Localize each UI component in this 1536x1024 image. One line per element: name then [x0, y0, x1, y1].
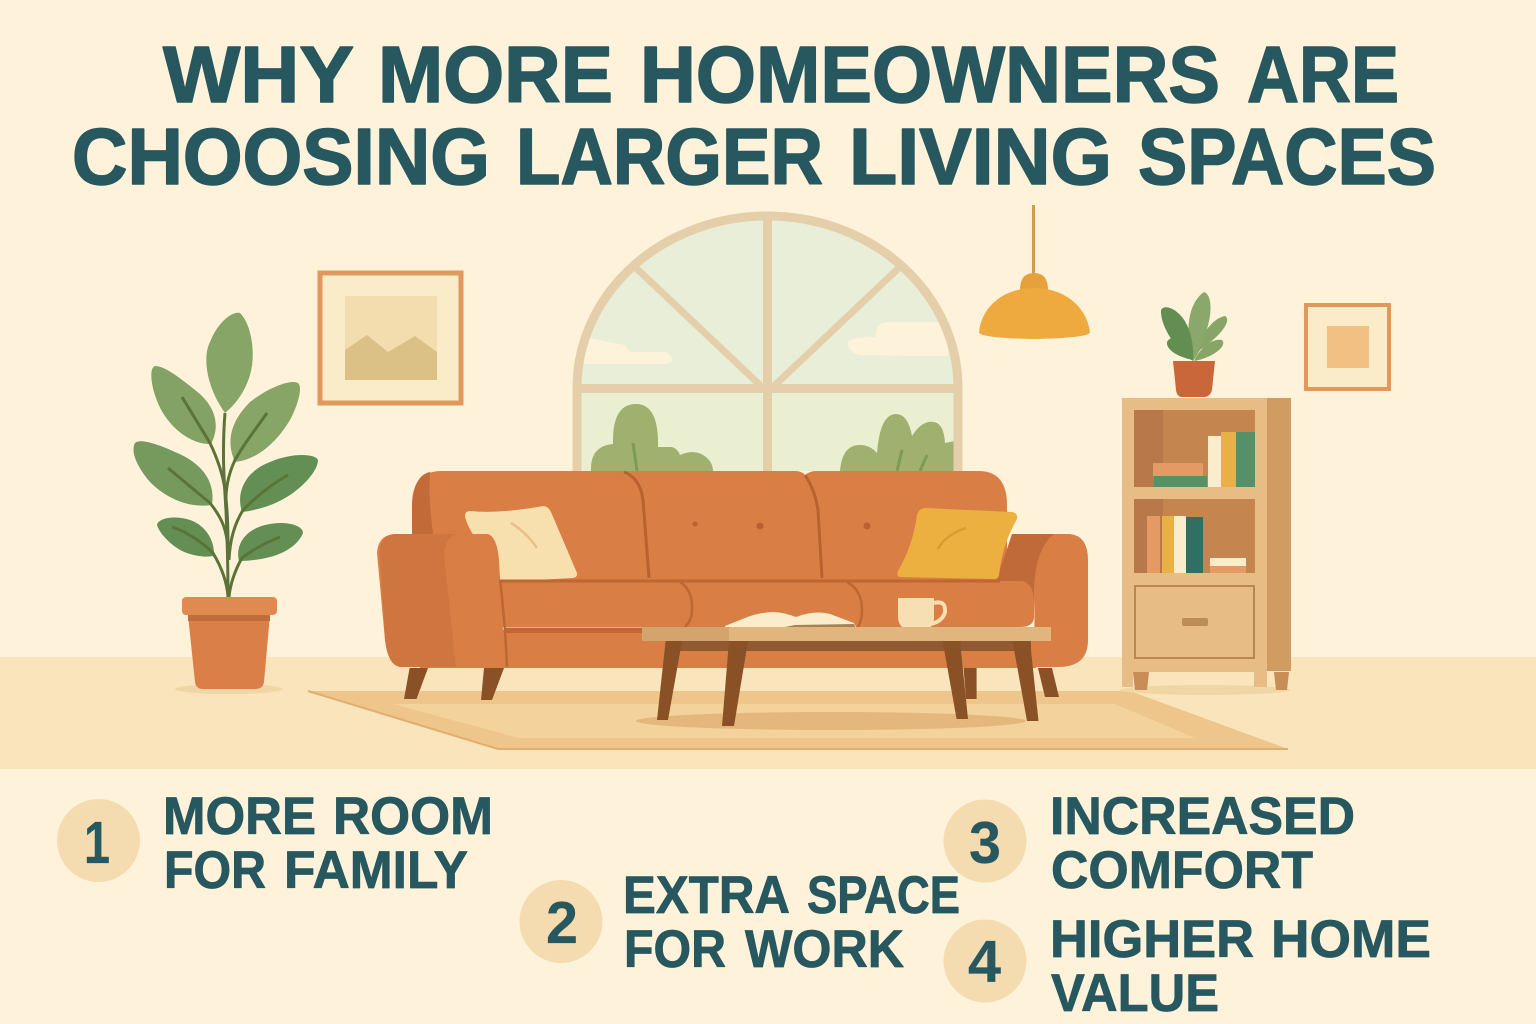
floor plant	[133, 313, 318, 694]
title: LARGER	[516, 112, 823, 201]
reason 3: 3	[969, 810, 1001, 876]
title	[72, 30, 1436, 201]
reason 2: FOR	[624, 920, 726, 979]
reason 3	[944, 787, 1355, 900]
rug	[308, 691, 1288, 749]
reason 1: 1	[84, 810, 110, 876]
reason 2: SPACE	[807, 866, 960, 925]
reason 4: HIGHER	[1050, 910, 1254, 969]
framed landscape picture	[320, 273, 461, 403]
reason 4: 4	[968, 929, 1001, 995]
small framed picture	[1306, 305, 1389, 389]
reason 1: FAMILY	[284, 841, 468, 900]
yellow cushion	[897, 508, 1017, 579]
reason 2: 2	[546, 890, 578, 956]
title: SPACES	[1138, 112, 1436, 201]
reason 2: EXTRA	[623, 866, 790, 925]
reason 3: COMFORT	[1051, 841, 1313, 900]
cream cushion	[465, 506, 577, 582]
reason 4: VALUE	[1051, 964, 1219, 1023]
title: CHOOSING	[72, 112, 490, 201]
sofa	[377, 471, 1088, 700]
reason 4	[944, 910, 1431, 1023]
coffee table with book and cup	[642, 598, 1051, 726]
reason 1: MORE	[163, 787, 316, 846]
title: MORE	[378, 30, 613, 119]
reason 4: HOME	[1271, 910, 1431, 969]
pendant lamp	[979, 205, 1090, 339]
arched window	[577, 216, 958, 471]
bookshelf with plant	[1120, 292, 1291, 695]
title: ARE	[1247, 30, 1399, 119]
reason 2	[520, 866, 960, 979]
title: WHY	[163, 30, 354, 119]
reason 3: INCREASED	[1050, 787, 1355, 846]
reason 1	[57, 787, 493, 900]
small potted plant	[1161, 292, 1227, 397]
reason 2: WORK	[745, 920, 904, 979]
reason 1: ROOM	[333, 787, 493, 846]
title: LIVING	[849, 112, 1112, 201]
title: HOMEOWNERS	[640, 30, 1220, 119]
reason 1: FOR	[164, 841, 266, 900]
